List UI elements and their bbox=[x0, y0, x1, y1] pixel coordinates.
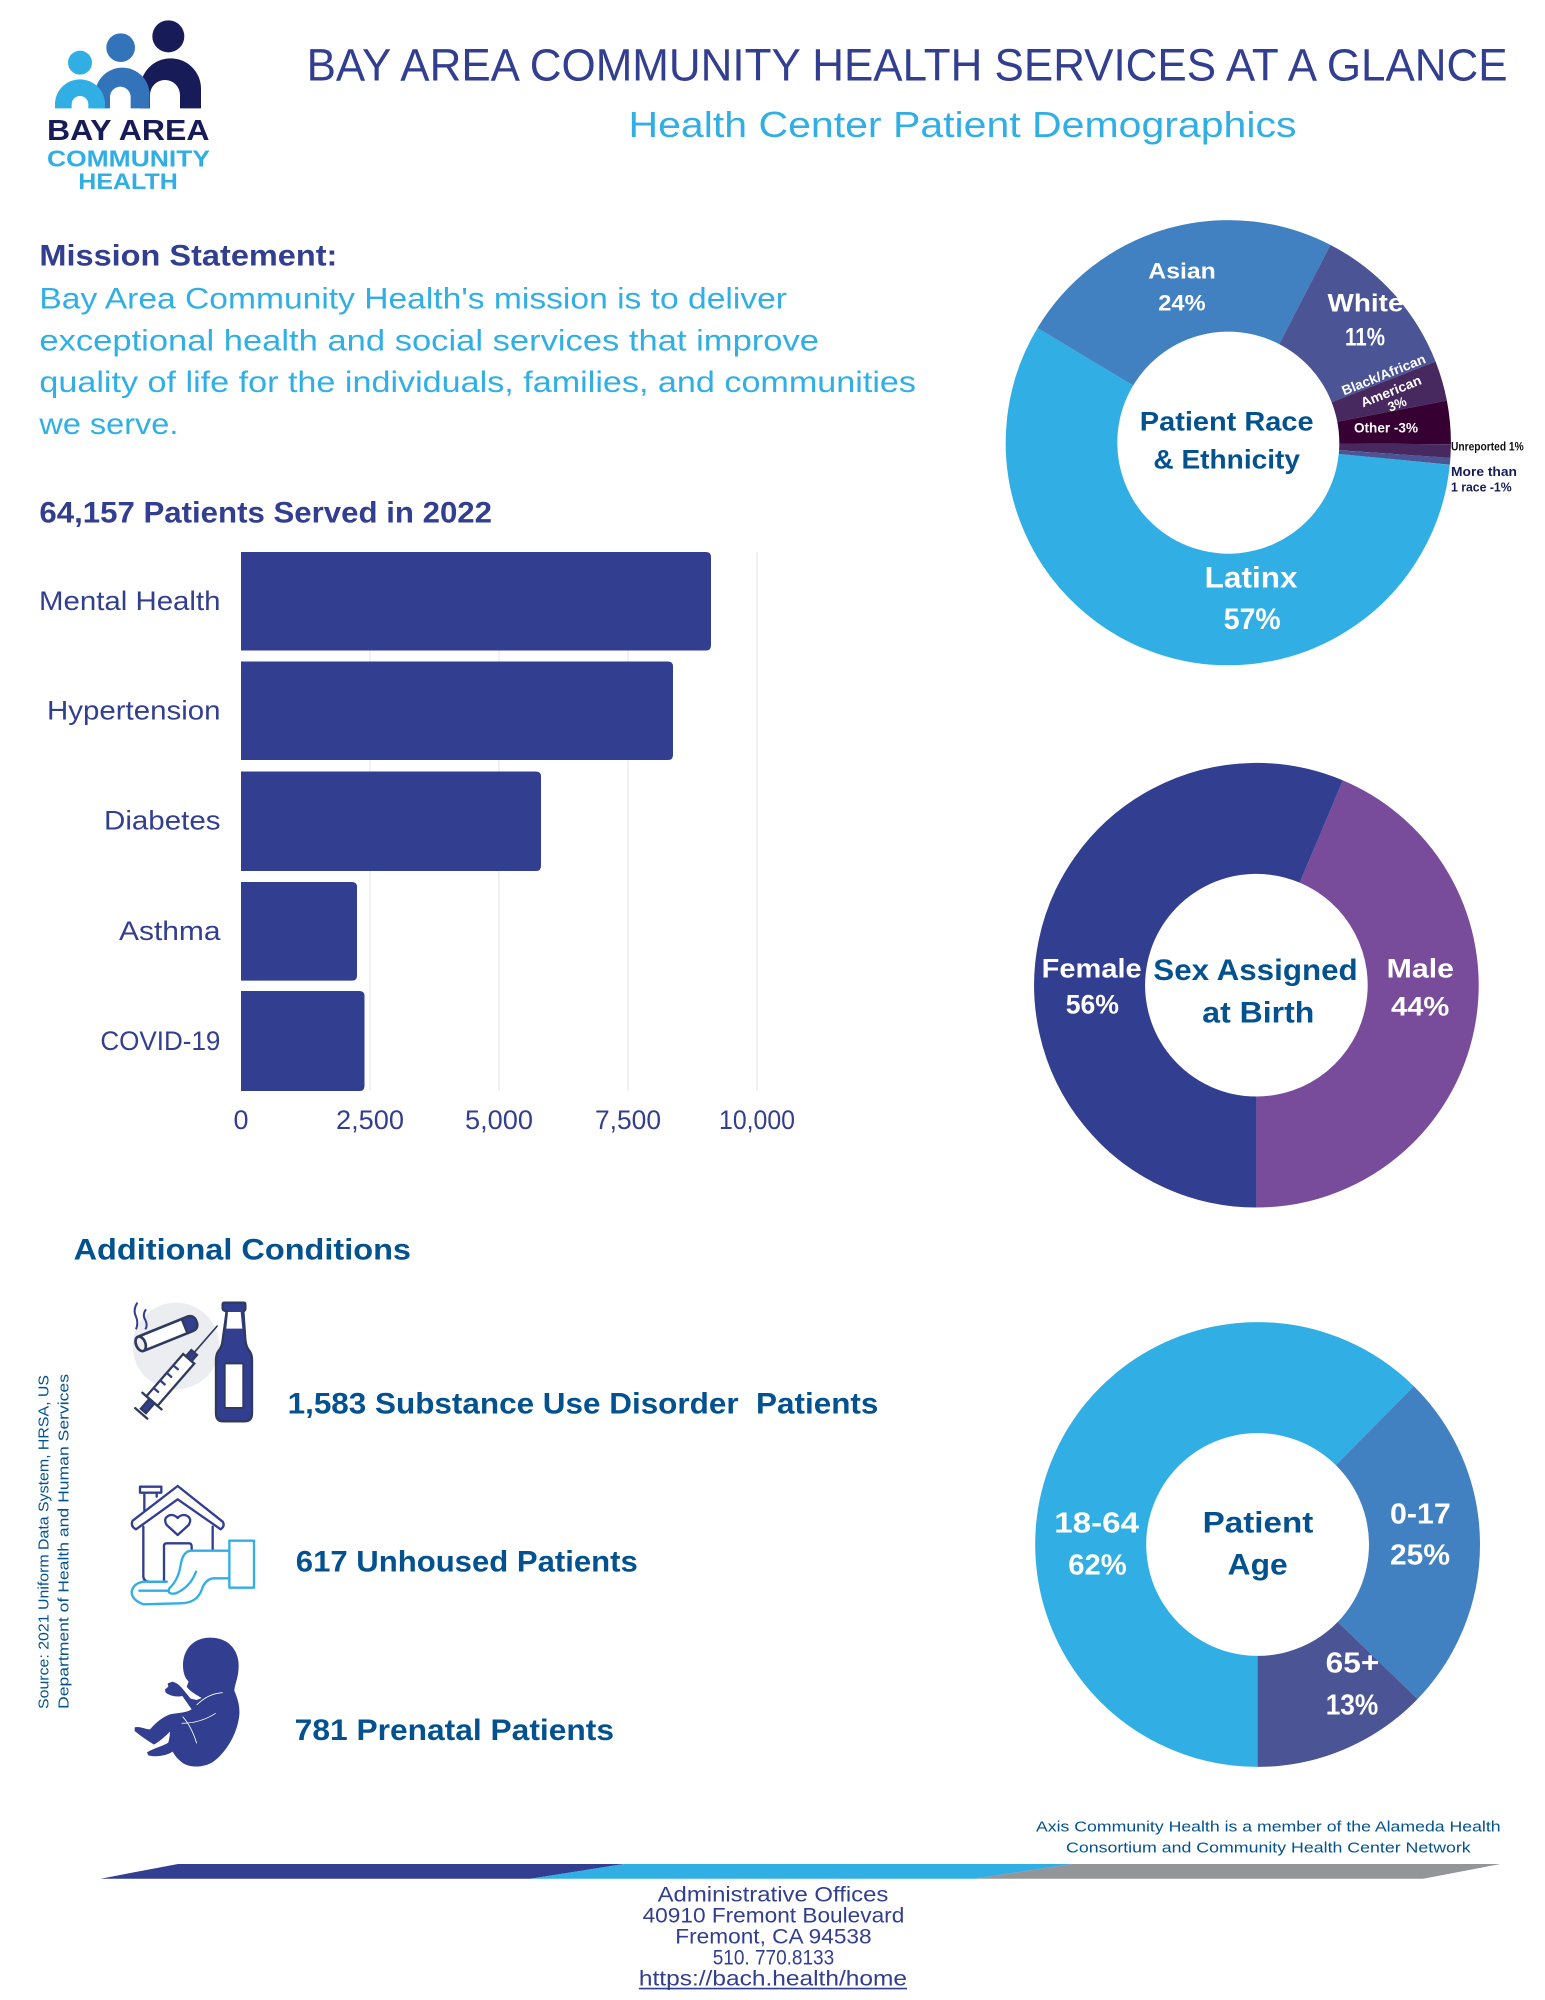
source note (rotated) bbox=[35, 1374, 72, 1709]
age donut labels: 0-17 bbox=[1390, 1498, 1451, 1530]
sex donut labels: Female bbox=[1042, 954, 1142, 984]
x axis labels: 10,000 bbox=[719, 1105, 795, 1135]
slice: 18-64 62% bbox=[1091, 1378, 1375, 1711]
sex donut labels: 56% bbox=[1066, 989, 1119, 1019]
footer colour band bbox=[101, 1864, 1501, 1879]
race donut labels: American bbox=[1359, 373, 1424, 410]
additional conditions heading: Additional Conditions bbox=[74, 1234, 411, 1267]
administrative offices address: Fremont, CA 94538 bbox=[675, 1925, 872, 1948]
race donut labels: 11% bbox=[1345, 324, 1385, 352]
bar: Diabetes: Diabetes bbox=[104, 806, 220, 836]
race donut labels: More than bbox=[1451, 464, 1517, 479]
sex donut labels: 44% bbox=[1391, 992, 1449, 1022]
slice: Female 56% bbox=[1090, 818, 1321, 1152]
mission statement text bbox=[38, 282, 916, 441]
bar: COVID-19: COVID-19 bbox=[100, 1026, 220, 1056]
source note (rotated): Source: 2021 Uniform Data System, HRSA, US bbox=[35, 1375, 52, 1709]
bar: Hypertension: Hypertension bbox=[47, 696, 220, 726]
slice: Unreported 1% bbox=[1339, 444, 1451, 454]
x axis labels: 5,000 bbox=[465, 1105, 533, 1135]
donut chart: patient age bbox=[1091, 1378, 1425, 1711]
bar: Asthma: Asthma bbox=[119, 916, 221, 946]
logo: Bay Area Community Health bbox=[47, 20, 210, 194]
slice: Black/African American 3% bbox=[1384, 382, 1392, 411]
consortium membership note: Consortium and Community Health Center Network bbox=[1066, 1839, 1471, 1856]
bar: Diabetes bbox=[104, 772, 541, 871]
administrative offices address: https://bach.health/home bbox=[639, 1968, 907, 1991]
x axis labels: 7,500 bbox=[595, 1105, 661, 1135]
logo: Bay Area Community Health: COMMUNITY bbox=[47, 146, 210, 172]
slice: Asian 24% bbox=[1085, 276, 1305, 357]
condition: prenatal count: 781 Prenatal Patients bbox=[295, 1714, 614, 1747]
age donut centre title: Patient bbox=[1203, 1506, 1313, 1539]
x axis labels: 2,500 bbox=[336, 1105, 404, 1135]
race donut centre title: & Ethnicity bbox=[1153, 444, 1300, 474]
race donut labels: White bbox=[1328, 290, 1404, 318]
mission statement text: exceptional health and social services that improve bbox=[39, 324, 819, 358]
race donut labels: Black/African bbox=[1340, 351, 1428, 398]
administrative offices address bbox=[639, 1884, 907, 1991]
race donut labels: Unreported 1% bbox=[1451, 442, 1524, 454]
source note (rotated): Department of Health and Human Services bbox=[55, 1374, 72, 1709]
slice: White 11% bbox=[1305, 294, 1384, 382]
logo: Bay Area Community Health: HEALTH bbox=[78, 169, 178, 194]
race donut labels: 3% bbox=[1386, 394, 1409, 415]
bar: COVID-19 bbox=[100, 991, 365, 1091]
age donut labels: 62% bbox=[1068, 1549, 1127, 1581]
sex donut centre title: Sex Assigned bbox=[1153, 954, 1358, 987]
race donut labels: 57% bbox=[1224, 603, 1281, 636]
bar chart: patients served by condition bbox=[39, 552, 795, 1135]
title: BAY AREA COMMUNITY HEALTH SERVICES AT A GLANCE bbox=[307, 40, 1508, 91]
bar: Mental Health bbox=[39, 552, 711, 650]
race donut labels: Other -3% bbox=[1354, 421, 1418, 436]
condition: substance use disorder count: 1,583 Substance Use Disorder Patients bbox=[288, 1388, 878, 1420]
age donut centre title bbox=[1203, 1506, 1313, 1581]
logo: Bay Area Community Health: BAY AREA bbox=[47, 115, 210, 147]
sex donut centre title bbox=[1153, 954, 1358, 1029]
race donut centre title: Patient Race bbox=[1140, 407, 1314, 437]
administrative offices address: 510. 770.8133 bbox=[713, 1946, 834, 1969]
age donut centre title: Age bbox=[1228, 1548, 1288, 1581]
consortium membership note: Axis Community Health is a member of the Alameda Health bbox=[1036, 1819, 1501, 1836]
consortium membership note bbox=[1036, 1819, 1501, 1856]
sex donut centre title: at Birth bbox=[1202, 996, 1314, 1029]
administrative offices address: 40910 Fremont Boulevard bbox=[643, 1905, 904, 1928]
icon: hand holding house bbox=[132, 1486, 254, 1604]
icon: fetus silhouette bbox=[135, 1638, 239, 1767]
donut chart: sex assigned at birth bbox=[1090, 818, 1423, 1152]
mission statement text: Bay Area Community Health's mission is to deliver bbox=[39, 282, 787, 315]
x axis labels: 0 bbox=[234, 1105, 248, 1135]
slice: Latinx 57% bbox=[1062, 357, 1394, 609]
race donut labels: 24% bbox=[1158, 291, 1206, 316]
bar chart heading: 64,157 Patients Served in 2022 bbox=[39, 497, 492, 530]
bar: Mental Health: Mental Health bbox=[39, 586, 220, 616]
slice: 0-17 25% bbox=[1375, 1426, 1425, 1660]
subtitle: Health Center Patient Demographics bbox=[628, 104, 1296, 145]
race donut centre title bbox=[1140, 407, 1314, 474]
mission statement text: we serve. bbox=[38, 408, 178, 441]
condition: unhoused count: 617 Unhoused Patients bbox=[296, 1546, 638, 1579]
mission statement heading: Mission Statement: bbox=[39, 240, 337, 273]
race donut labels: Latinx bbox=[1205, 562, 1298, 595]
age donut labels: 65+ bbox=[1326, 1647, 1379, 1679]
mission statement text: quality of life for the individuals, families, and communities bbox=[39, 366, 916, 399]
race donut labels: Asian bbox=[1148, 258, 1216, 283]
race donut labels bbox=[1148, 258, 1524, 636]
slice: Other 3% bbox=[1392, 411, 1395, 444]
icon: cigarette, syringe and bottle bbox=[132, 1303, 252, 1422]
age donut labels: 25% bbox=[1390, 1539, 1450, 1571]
bar: Hypertension bbox=[47, 662, 673, 760]
donut chart: patient race and ethnicity bbox=[1062, 276, 1395, 609]
sex donut labels bbox=[1042, 954, 1454, 1022]
age donut labels bbox=[1054, 1498, 1451, 1721]
administrative offices address: Administrative Offices bbox=[658, 1884, 888, 1907]
x axis labels bbox=[234, 1105, 795, 1135]
age donut labels: 18-64 bbox=[1054, 1508, 1139, 1540]
slice: Male 44% bbox=[1256, 832, 1423, 1152]
slice: 65+ 13% bbox=[1258, 1660, 1378, 1711]
race donut labels: 1 race -1% bbox=[1451, 480, 1512, 495]
age donut labels: 13% bbox=[1326, 1689, 1378, 1721]
slice: More than 1 race 1% bbox=[1338, 454, 1451, 459]
bar: Asthma bbox=[119, 882, 357, 981]
sex donut labels: Male bbox=[1387, 954, 1454, 984]
